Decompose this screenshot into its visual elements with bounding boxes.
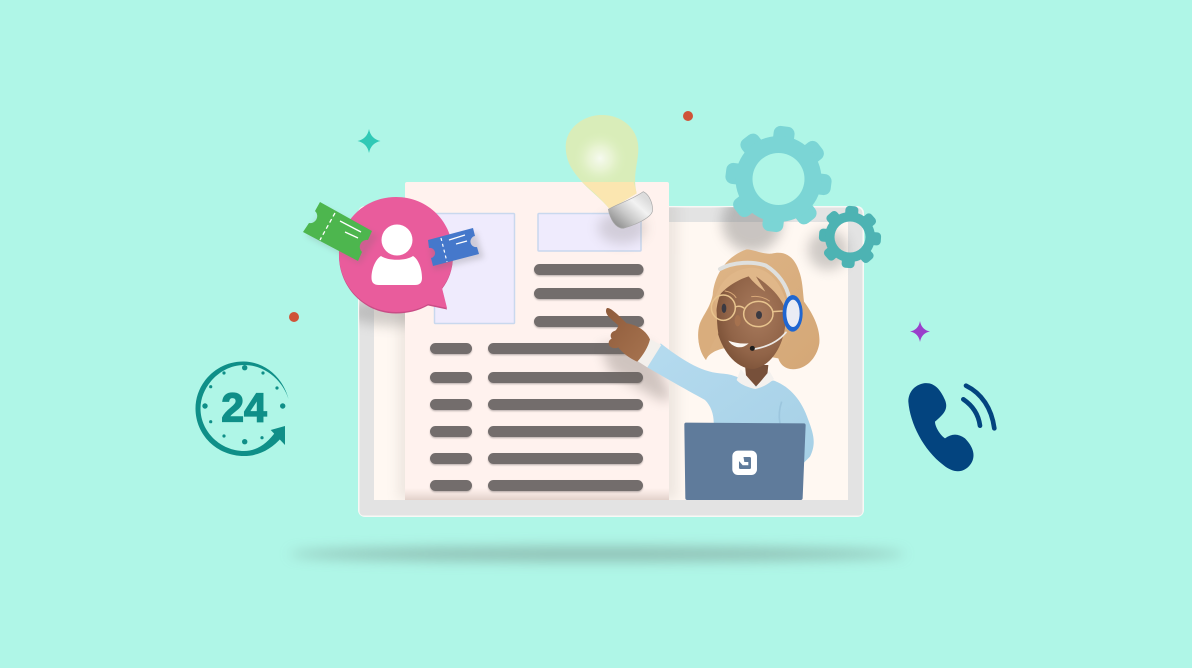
hair back <box>698 249 819 369</box>
monitor frame <box>358 206 864 517</box>
clock arrow head <box>271 426 285 445</box>
nose <box>735 315 741 326</box>
gear: small <box>817 204 883 270</box>
text lines: rows <box>430 343 643 491</box>
user body <box>372 256 422 285</box>
mic <box>750 346 755 351</box>
bulb shadow on document <box>598 212 646 244</box>
ticket: blue <box>428 228 484 270</box>
bulb base <box>608 192 652 228</box>
handset <box>908 383 974 471</box>
image placeholder: right <box>538 214 641 251</box>
bulb neck tint <box>582 182 637 209</box>
mic arm <box>755 332 786 349</box>
sweater fold <box>779 402 782 423</box>
face <box>716 274 786 369</box>
agent head <box>698 249 819 389</box>
clock label: 24 <box>221 384 267 430</box>
chat bubble with user <box>339 197 453 314</box>
signal waves <box>963 386 994 428</box>
clock arc <box>196 361 288 456</box>
sparkle: teal <box>358 129 380 153</box>
image placeholder: left <box>434 214 514 324</box>
ground shadow <box>289 546 905 562</box>
paper and gear shadows on frame <box>346 192 848 500</box>
bulb glow <box>573 132 627 185</box>
arm shadow on document <box>600 345 672 400</box>
hair side lock <box>698 298 718 360</box>
earpiece <box>783 295 803 332</box>
laptop logo <box>732 451 757 475</box>
icon: 24 hour clock <box>196 361 288 456</box>
hand <box>606 308 650 362</box>
headband <box>720 263 789 298</box>
eyebrows <box>725 291 769 301</box>
bulb glass <box>566 115 638 209</box>
neck <box>745 365 768 386</box>
cuff <box>637 339 661 367</box>
mouth <box>728 341 749 347</box>
sparkle: purple <box>910 321 930 342</box>
user head <box>382 224 412 256</box>
gear: large <box>725 126 832 232</box>
icon: phone <box>908 383 994 471</box>
dot: left <box>289 312 299 322</box>
agent body <box>606 308 814 463</box>
agent character <box>606 249 819 500</box>
eyes <box>722 304 762 319</box>
frame bottom strip <box>360 500 862 516</box>
clock ticks <box>202 365 285 444</box>
sweater <box>646 343 814 463</box>
glasses <box>711 295 783 327</box>
illustration canvas <box>196 111 997 568</box>
text lines: top right <box>534 264 644 327</box>
dot: top <box>683 111 693 121</box>
collar <box>737 369 774 389</box>
light bulb <box>566 115 652 228</box>
hair fringe <box>714 268 787 306</box>
ticket: green <box>303 202 378 264</box>
document panel <box>405 182 669 500</box>
laptop <box>684 423 806 500</box>
